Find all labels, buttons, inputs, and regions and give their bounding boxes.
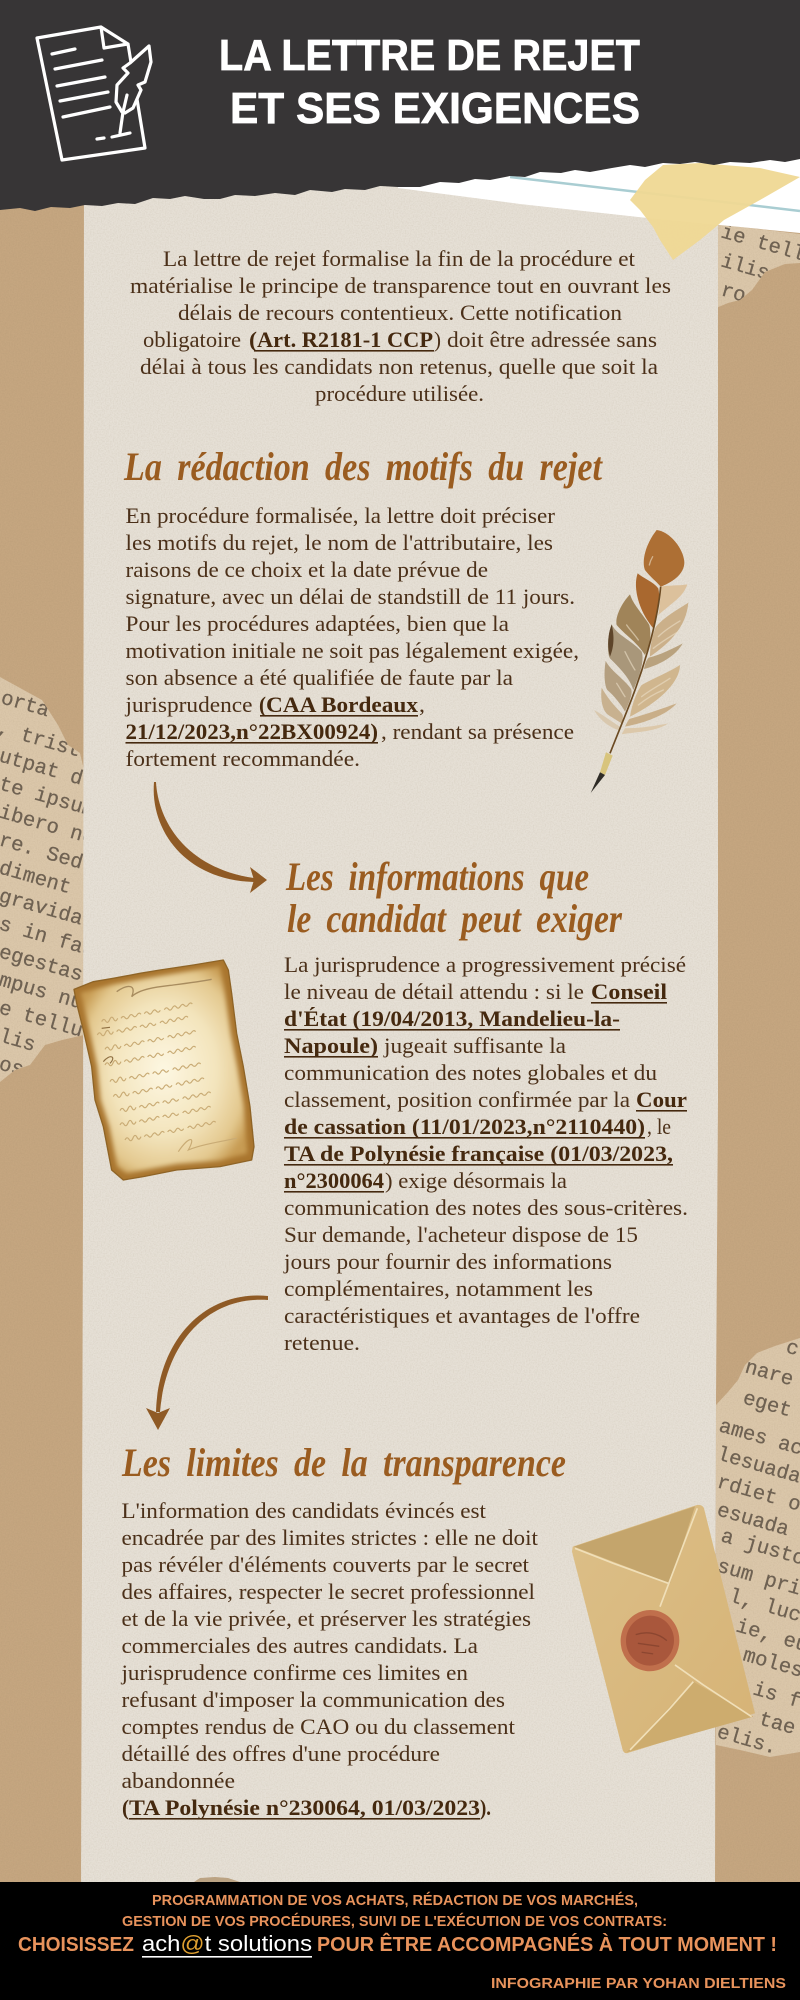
intro text: doit être adressée sans [447, 327, 657, 352]
paper scrap: bottom right typewriter text: eget [740, 1388, 794, 1423]
body text: section 2: le niveau de détail attendu : si le [284, 979, 584, 1004]
body text: section 1 [124, 503, 579, 771]
arrow: to section 2 [154, 782, 267, 893]
body text: section 3: ). [480, 1795, 491, 1820]
body text: section 1: CAA Bordeaux [266, 692, 418, 717]
paper scrap: left typewriter text [0, 677, 84, 1082]
body text: section 2: de cassation (11/01/2023,n°2110440) [284, 1114, 645, 1139]
body text: section 3: abandonnée [122, 1768, 235, 1793]
body text: section 2 [283, 952, 688, 1355]
body text: section 2: communication des notes globales et du [284, 1060, 657, 1085]
torn kraft fragment [194, 1877, 240, 1882]
body text: section 2: Cour [636, 1087, 687, 1112]
title [219, 31, 640, 133]
body text: section 1: signature, avec un délai de standstill de 11 jours. [126, 584, 575, 609]
footer text: INFOGRAPHIE PAR YOHAN DIELTIENS [491, 1975, 786, 1992]
body text: section 3: des affaires, respecter le secret professionnel [122, 1579, 535, 1604]
paper scrap: bottom right typewriter text [714, 1335, 800, 1761]
body text: section 3 [120, 1498, 538, 1820]
yellow tape [630, 163, 800, 260]
body text: section 2: retenue. [284, 1330, 360, 1355]
body text: section 2: TA de Polynésie française (01/03/2023, [284, 1141, 673, 1166]
body text: section 1: raisons de ce choix et la date prévue de [126, 557, 488, 582]
body text: section 1: fortement recommandée. [126, 746, 360, 771]
paper scrap: bottom right typewriter text: elis. [714, 1722, 780, 1761]
body text: section 2: Sur demande, l'acheteur dispose de 15 [284, 1222, 638, 1247]
intro text [130, 246, 671, 406]
body text: section 2: d'État (19/04/2013, Mandelieu-la- [284, 1006, 620, 1031]
heading: section 2 [285, 854, 622, 941]
paper scrap: bottom right typewriter text: esuada [714, 1500, 791, 1542]
body text: section 2: caractéristiques et avantages de l'offre [284, 1303, 640, 1328]
icon: wax seal [617, 1606, 683, 1675]
body text: section 1: motivation initiale ne soit pas légalement exigée, [126, 638, 579, 663]
body text: section 1: jurisprudence [124, 692, 252, 717]
body text: section 3: et de la vie privée, et préserver les stratégies [122, 1606, 531, 1631]
heading: section 3: Les limites de la transparence [121, 1440, 566, 1485]
intro text: procédure utilisée. [315, 381, 484, 406]
body text: section 1: son absence a été qualifiée de faute par la [126, 665, 513, 690]
body text: section 3: refusant d'imposer la communication des [122, 1687, 505, 1712]
body text: section 3: détaillé des offres d'une procédure [122, 1741, 440, 1766]
paper scrap: bottom right typewriter text: tae [756, 1709, 798, 1741]
paper scrap: top right typewriter text: ros [718, 280, 760, 312]
blue ruled line [510, 177, 800, 211]
footer band [0, 1882, 800, 2000]
panel: la rédaction des motifs du rejet [123, 444, 604, 771]
footer text: CHOISISSEZ [18, 1934, 134, 1956]
intro text: obligatoire [143, 327, 241, 352]
body text: section 1: Pour les procédures adaptées, bien que la [126, 611, 509, 636]
footer text: POUR ÊTRE ACCOMPAGNÉS À TOUT MOMENT ! [317, 1932, 777, 1956]
footer text: GESTION DE VOS PROCÉDURES, SUIVI DE L'EXÉCUTION DE VOS CONTRATS: [122, 1913, 667, 1930]
heading: section 2: le candidat peut exiger [287, 896, 622, 941]
panel: les limites de la transparence [120, 1440, 566, 1820]
body text: section 3: pas révéler d'éléments couverts par le secret [122, 1552, 529, 1577]
body text: section 3: L'information des candidats évincés est [122, 1498, 486, 1523]
body text: section 2: n°2300064 [284, 1168, 384, 1193]
body text: section 2: , le [647, 1114, 671, 1139]
paper scrap: top right typewriter text: ilis [718, 251, 772, 286]
body text: section 3: comptes rendus de CAO ou du classement [122, 1714, 515, 1739]
body text: section 2: Napoule) [284, 1033, 378, 1058]
body text: section 1: , [419, 692, 425, 717]
paper scrap: top right typewriter text [718, 224, 800, 307]
icon: feather [591, 530, 688, 793]
body text: section 3: jurisprudence confirme ces limites en [120, 1660, 468, 1685]
body text: section 2: complémentaires, notamment les [284, 1276, 593, 1301]
cream paper panel [81, 160, 718, 1890]
heading: section 2: Les informations que [285, 854, 589, 899]
body text: section 2: Conseil [591, 979, 667, 1004]
body text: section 2: jours pour fournir des informations [283, 1249, 612, 1274]
intro text: La lettre de rejet formalise la fin de la procédure et [163, 246, 635, 271]
intro text: délai à tous les candidats non retenus, quelle que soit la [140, 354, 658, 379]
footer text [18, 1892, 786, 1992]
title: ET SES EXIGENCES [230, 84, 640, 133]
arrow: to section 3 [146, 1296, 268, 1430]
icon: letter and quill [37, 27, 151, 160]
body text: section 3: commerciales des autres candidats. La [122, 1633, 478, 1658]
body text: section 1: les motifs du rejet, le nom de l'attributaire, les [126, 530, 553, 555]
intro text: matérialise le principe de transparence tout en ouvrant les [130, 273, 671, 298]
body text: section 1: En procédure formalisée, la lettre doit préciser [126, 503, 556, 528]
intro text: ( [249, 327, 257, 352]
logo: ach@t solutions: ach@t solutions [142, 1931, 312, 1956]
intro text: ) [434, 327, 441, 352]
image: old parchment [74, 960, 254, 1180]
body text: section 3: ( [122, 1795, 129, 1820]
body text: section 3: encadrée par des limites strictes : elle ne doit [122, 1525, 538, 1550]
intro text: délais de recours contentieux. Cette notification [178, 300, 622, 325]
body text: section 2: jugeait suffisante la [383, 1033, 566, 1058]
body text: section 1: 21/12/2023,n°22BX00924) [126, 719, 378, 744]
body text: section 3: TA Polynésie n°230064, 01/03/2023 [129, 1795, 480, 1820]
body text: section 2: classement, position confirmée par la [284, 1087, 630, 1112]
footer text: PROGRAMMATION DE VOS ACHATS, RÉDACTION DE VOS MARCHÉS, [152, 1892, 638, 1909]
torn white paper [398, 150, 800, 233]
body text: section 2: ) exige désormais la [385, 1168, 567, 1193]
body text: section 1: ( [259, 692, 266, 717]
body text: section 1: , rendant sa présence [381, 719, 574, 744]
intro text: Art. R2181-1 CCP [257, 327, 433, 352]
body text: section 2: La jurisprudence a progressivement précisé [284, 952, 686, 977]
header band [0, 0, 800, 211]
image: sealed envelope [572, 1505, 755, 1753]
heading: section 1: La rédaction des motifs du rejet [123, 444, 604, 489]
title: LA LETTRE DE REJET [219, 31, 640, 80]
body text: section 2: communication des notes des sous-critères. [284, 1195, 688, 1220]
panel: les informations que le candidat peut exiger [283, 854, 688, 1355]
paper scrap: bottom right typewriter text: nare [742, 1357, 796, 1392]
